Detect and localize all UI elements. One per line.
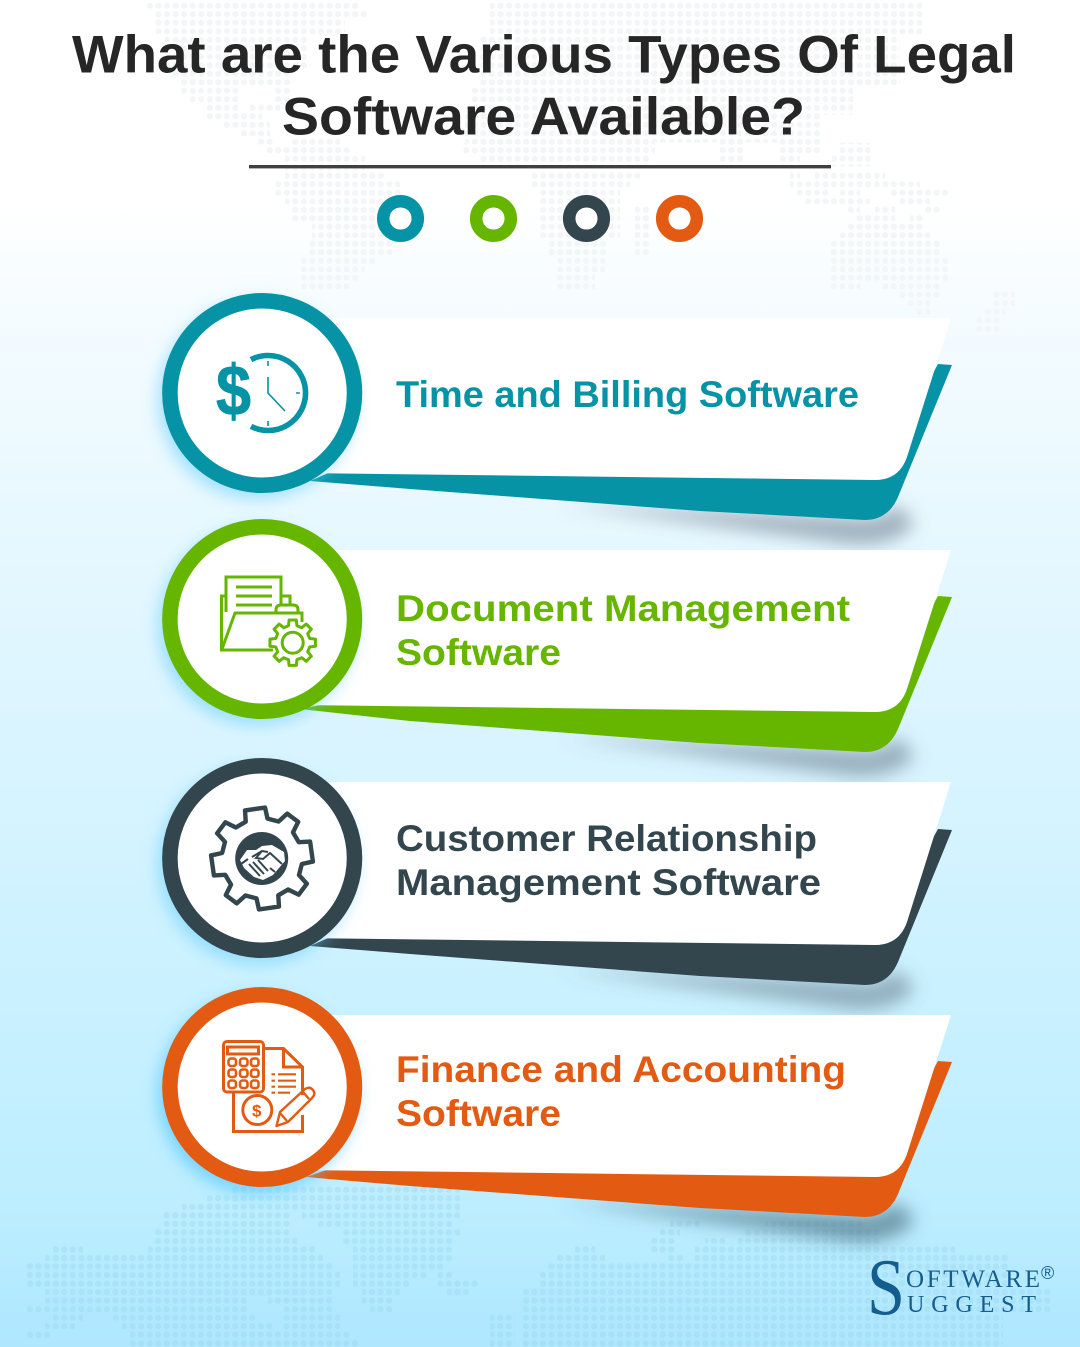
icon circle	[170, 995, 354, 1179]
card panel	[300, 318, 951, 480]
logo: SoftwareSuggest	[867, 1244, 1054, 1332]
icon: dollar and clock: $	[216, 352, 251, 431]
icon: calculator, invoice and pen: $	[252, 1102, 262, 1120]
item 2: document management software	[158, 527, 952, 777]
card panel	[300, 1015, 951, 1177]
circle glow	[158, 301, 356, 499]
logo: SoftwareSuggest: S	[867, 1244, 905, 1332]
background world map top	[146, 2, 1015, 333]
icon: folder and gear	[222, 577, 315, 665]
card shadow	[560, 504, 915, 545]
logo: SoftwareSuggest: UGGEST	[907, 1292, 1036, 1318]
label: Management Software	[396, 862, 821, 903]
heading: What are the Various Types Of Legal	[72, 26, 1016, 84]
icon: gear and handshake	[206, 802, 318, 915]
logo: SoftwareSuggest: OFTWARE	[906, 1266, 1040, 1293]
circle glow	[158, 766, 356, 964]
card panel	[300, 550, 951, 712]
card ribbon	[300, 596, 952, 752]
icon circle	[170, 766, 354, 950]
heading	[72, 26, 1016, 146]
icon circle	[170, 527, 354, 711]
card ribbon	[310, 829, 952, 985]
icon: dollar and clock	[216, 352, 306, 431]
icon: calculator, invoice and pen	[224, 1042, 314, 1132]
label: Finance and Accounting	[396, 1049, 846, 1090]
label	[396, 818, 821, 903]
label: Software	[396, 1093, 561, 1134]
card shadow	[560, 1201, 915, 1242]
logo: SoftwareSuggest: ®	[1041, 1263, 1054, 1283]
label	[396, 1049, 846, 1134]
ring markers	[383, 201, 697, 236]
card ribbon	[310, 364, 952, 520]
background world map bottom	[27, 1186, 1050, 1347]
label: Customer Relationship	[396, 818, 817, 859]
card ribbon	[306, 1061, 952, 1217]
icon circle	[170, 301, 354, 485]
circle glow	[158, 527, 356, 725]
item 3: customer relationship management software	[158, 766, 952, 1010]
circle glow	[158, 995, 356, 1193]
label: Software	[396, 632, 561, 673]
card shadow	[560, 736, 915, 777]
heading divider	[249, 165, 831, 168]
label: Time and Billing Software	[396, 374, 859, 415]
label	[396, 588, 850, 673]
label: Document Management	[396, 588, 850, 629]
heading: Software Available?	[282, 88, 805, 146]
item 1: time and billing software	[158, 301, 952, 545]
item 4: finance and accounting software	[158, 995, 952, 1242]
card panel	[300, 782, 951, 945]
card shadow	[560, 969, 915, 1010]
